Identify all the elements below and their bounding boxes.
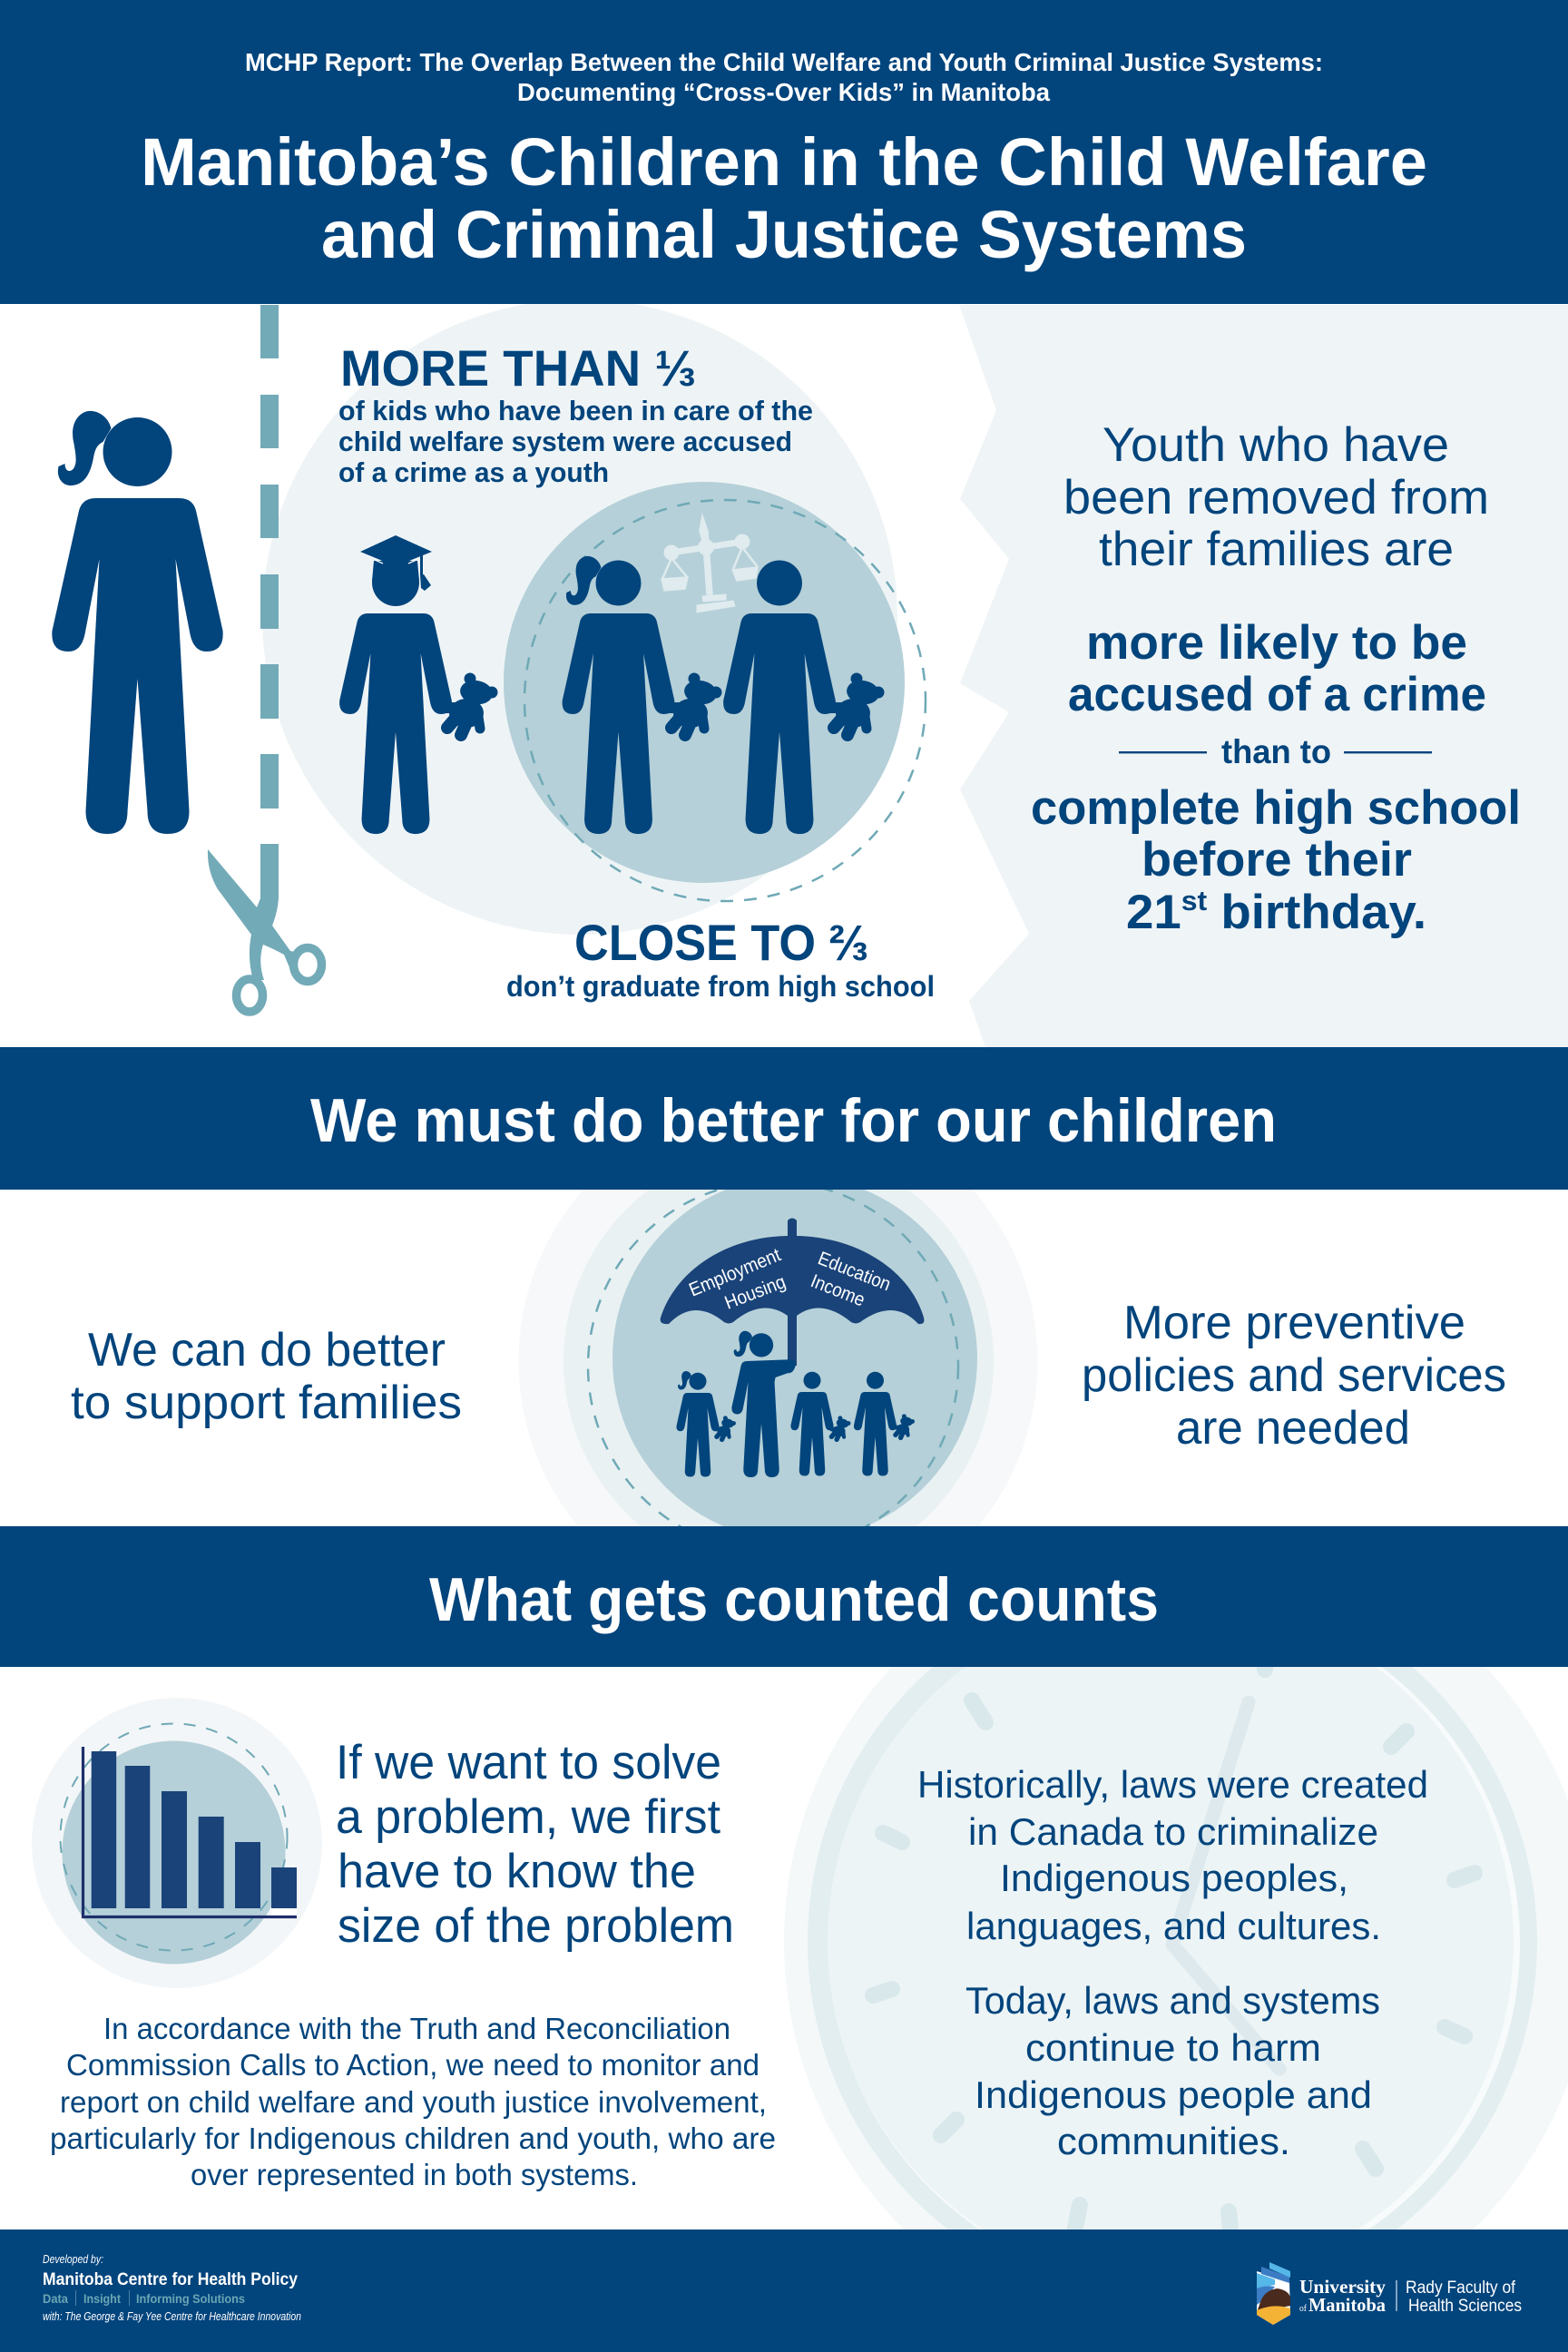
line 7: Indigenous people and [975, 2073, 1372, 2116]
text block: history of laws [917, 1763, 1428, 2162]
emphasis line 1: more likely to be [1086, 616, 1467, 670]
stat: close to two thirds [506, 914, 935, 1003]
main circle [62, 1740, 285, 1964]
stat line 2: child welfare system were accused [338, 426, 792, 457]
umbrella label: Housing [722, 1271, 789, 1314]
woman holding umbrella [731, 1331, 796, 1477]
white base strip [271, 1908, 297, 1916]
logo: University of Manitoba [1257, 2262, 1522, 2325]
line 4: languages, and cultures. [966, 1905, 1381, 1947]
tagline [43, 2290, 245, 2306]
clock halo [784, 1537, 1568, 2347]
line 2: a problem, we first [336, 1790, 720, 1844]
line 1: Historically, laws were created [917, 1763, 1428, 1806]
title line 2: and Criminal Justice Systems [321, 197, 1247, 272]
icon: graduate child with teddy bear [339, 535, 497, 834]
header text [141, 48, 1427, 272]
girl [676, 1371, 736, 1477]
umbrella canopy [661, 1218, 924, 1366]
text block: youth removed from families [1031, 418, 1521, 939]
footer credits [43, 2252, 301, 2323]
line 5: Today, laws and systems [965, 1979, 1380, 2022]
line 2: to support families [71, 1377, 462, 1429]
emphasis line 2: accused of a crime [1068, 668, 1486, 721]
band heading: What gets counted counts [429, 1565, 1159, 1634]
title line 1: Manitoba’s Children in the Child Welfare [141, 124, 1427, 200]
tagline: Informing Solutions [136, 2291, 245, 2306]
bars [92, 1751, 297, 1908]
of: of [1299, 2303, 1307, 2314]
line 1: More preventive [1123, 1297, 1465, 1349]
line 1: In accordance with the Truth and Reconciliation [103, 2012, 730, 2045]
icon: family [676, 1331, 915, 1477]
stat line 1: of kids who have been in care of the [338, 395, 813, 426]
report line: MCHP Report: The Overlap Between the Child Welfare and Youth Criminal Justice Systems: [245, 48, 1323, 76]
umbrella label: Employment [686, 1244, 784, 1301]
dashed ring [524, 500, 926, 901]
middle pale circle [564, 1146, 994, 1576]
band: we must do better [0, 1047, 1568, 1190]
line 3: Indigenous peoples, [1000, 1857, 1348, 1899]
tagline: Insight [83, 2291, 121, 2306]
icon: scales of justice [662, 515, 758, 612]
icon: scissors [208, 844, 321, 1012]
dashed ring [60, 1724, 287, 1951]
illustration: clock [784, 1537, 1568, 2347]
band background [0, 1526, 1568, 1667]
outer pale circle [519, 1102, 1038, 1621]
boy [790, 1372, 850, 1475]
line 1: If we want to solve [336, 1736, 721, 1789]
emphasis line 5: st [1181, 885, 1207, 916]
crest [1257, 2262, 1290, 2325]
line 4: size of the problem [338, 1899, 734, 1953]
line 3: have to know the [338, 1845, 696, 1898]
pale background circle [262, 299, 897, 935]
clock face [828, 1599, 1514, 2285]
manitoba wordmark: Manitoba [1308, 2294, 1386, 2316]
axes [83, 1747, 297, 1916]
clock highlight [828, 1598, 1520, 2289]
icon: boy with teddy bear [723, 561, 884, 834]
line 6: continue to harm [1025, 2026, 1321, 2069]
clock hands [1172, 1702, 1279, 2069]
outer pale circle [32, 1698, 322, 1988]
line 5: over represented in both systems. [191, 2158, 638, 2191]
dashed cut line [260, 305, 279, 808]
stat heading: CLOSE TO ⅔ [574, 914, 868, 971]
emphasis line 3: complete high school [1031, 781, 1521, 835]
boy [854, 1372, 915, 1475]
intro line 2: been removed from [1063, 471, 1489, 524]
centre name: Manitoba Centre for Health Policy [43, 2270, 298, 2289]
bar chart [32, 1698, 322, 1988]
illustration: umbrella circles [519, 1102, 1038, 1621]
band: what gets counted counts [0, 1526, 1568, 1667]
band heading: We must do better for our children [310, 1086, 1277, 1155]
emphasis line 5: birthday. [1207, 886, 1426, 939]
line 8: communities. [1057, 2120, 1290, 2162]
text block: size of the problem [336, 1736, 734, 1953]
text block: preventive policies [1082, 1297, 1506, 1455]
than to: than to [1221, 733, 1331, 770]
panel: children illustration [262, 299, 926, 935]
umbrella label: Income [808, 1270, 867, 1310]
text block: truth and reconciliation [50, 2012, 776, 2191]
stat heading: MORE THAN ⅓ [340, 339, 696, 397]
faculty line 2: Health Sciences [1408, 2297, 1522, 2316]
intro line 1: Youth who have [1102, 418, 1449, 472]
header band [0, 0, 1568, 304]
stat: more than one third [338, 339, 813, 488]
accused circle [504, 482, 905, 883]
dashed ring [588, 1181, 958, 1552]
icon: umbrella [661, 1218, 924, 1366]
line 2: Commission Calls to Action, we need to monitor and [66, 2048, 760, 2082]
panel: right side jagged background [959, 305, 1568, 1047]
report subtitle: Documenting “Cross-Over Kids” in Manitoba [517, 78, 1050, 106]
umbrella label: Education [815, 1248, 894, 1295]
footer band [0, 2230, 1568, 2352]
intro line 3: their families are [1099, 523, 1454, 576]
faculty line 1: Rady Faculty of [1406, 2278, 1516, 2298]
line 3: report on child welfare and youth justice involvement, [60, 2085, 767, 2119]
line 2: in Canada to criminalize [968, 1810, 1378, 1853]
emphasis line 5: 21 [1126, 886, 1180, 939]
partner line: with: The George & Fay Yee Centre for Healthcare Innovation [43, 2309, 301, 2323]
stat description: don’t graduate from high school [506, 970, 935, 1003]
icon: large girl figure [52, 411, 223, 834]
main circle [612, 1176, 977, 1541]
clock ticks [873, 1661, 1475, 2237]
university wordmark: University [1299, 2276, 1387, 2298]
band background [0, 1047, 1568, 1190]
text block: support families [71, 1324, 462, 1429]
line 1: We can do better [88, 1324, 446, 1377]
tagline: Data [43, 2291, 68, 2306]
emphasis line 4: before their [1142, 833, 1412, 887]
developed by: Developed by: [43, 2252, 103, 2266]
line 4: particularly for Indigenous children and youth, who are [50, 2122, 776, 2155]
icon: girl with teddy bear [563, 556, 722, 834]
line 2: policies and services [1082, 1349, 1506, 1402]
clock ring [808, 1577, 1537, 2307]
line 3: are needed [1176, 1402, 1410, 1455]
stat line 3: of a crime as a youth [338, 456, 609, 488]
